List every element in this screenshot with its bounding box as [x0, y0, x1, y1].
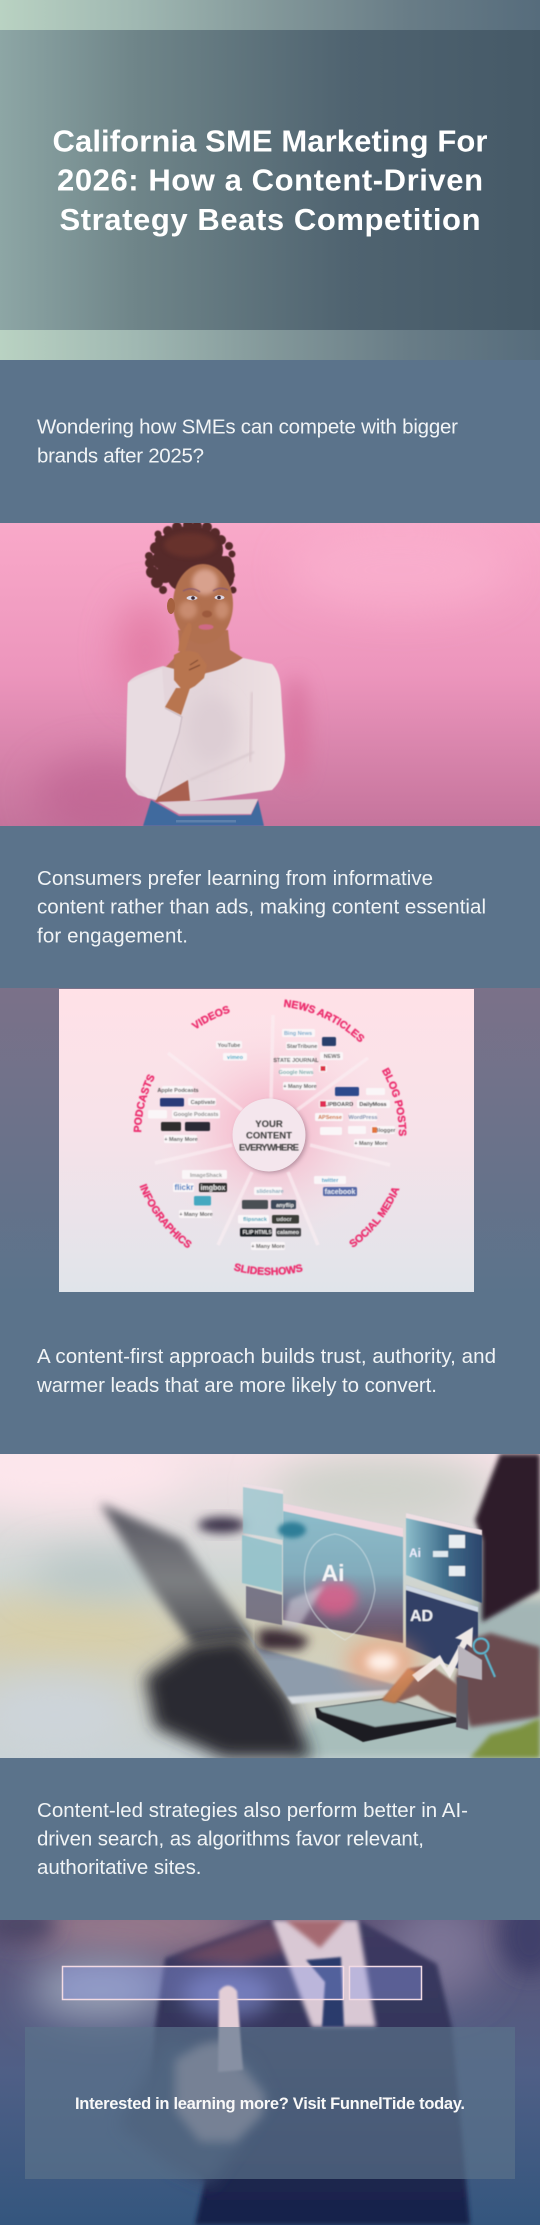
- chips: social media: [314, 1176, 357, 1196]
- search bar fill: [62, 1966, 344, 2000]
- dark blurred laptop base: [145, 1637, 312, 1758]
- chips: slideshows: udocr: [276, 1217, 292, 1223]
- chips: social media: facebook: [325, 1189, 355, 1196]
- text block: consumers prefer content: [37, 867, 486, 948]
- woman's sweater: [126, 658, 285, 802]
- chips: blog posts: FLIPBOARD: [321, 1102, 353, 1108]
- CTA overlay box: [25, 2027, 515, 2179]
- hologram: right top panel: Ai: [409, 1546, 421, 1560]
- woman's neck: [165, 630, 243, 678]
- text block: AI-driven search: Content-led strategies also perform better in AI-: [37, 1799, 468, 1822]
- centre circle: YOUR: [255, 1119, 283, 1130]
- chips: videos: vimeo: [227, 1055, 244, 1061]
- green plant: [470, 1718, 540, 1758]
- hologram: AD panel: AD: [410, 1608, 433, 1625]
- chips: slideshows: slideshare: [256, 1189, 284, 1195]
- person's hand on phone side: [455, 1633, 540, 1727]
- title: [52, 124, 488, 237]
- pointing hand: [382, 1665, 465, 1715]
- panel backdrop behind wheel diagram: [0, 988, 540, 1292]
- search bar: [62, 1966, 344, 2000]
- text block: consumers prefer content: content rather than ads, making content essential: [37, 896, 486, 919]
- text block: AI-driven search: driven search, as algorithms favor relevant,: [37, 1828, 424, 1851]
- title: 2026: How a Content-Driven: [57, 163, 483, 198]
- light glow: [346, 1640, 418, 1684]
- text block: intro question: Wondering how SMEs can compete with bigger: [37, 416, 458, 439]
- chips: slideshows: + Many More: [251, 1244, 285, 1250]
- chips: slideshows: anyflip: [276, 1203, 294, 1209]
- hologram: AD panel: [406, 1585, 478, 1677]
- neck: [285, 1920, 345, 1948]
- phone: [315, 1698, 458, 1742]
- chips: videos: YouTube: [218, 1043, 240, 1049]
- teal backdrop at right: [470, 1600, 540, 1660]
- app strip: [456, 1677, 468, 1730]
- suit: [150, 1920, 470, 2225]
- top gradient band: [0, 0, 540, 30]
- photo: businessman touching search bar: [0, 1895, 540, 2225]
- chips: news articles: STATE JOURNAL: [273, 1058, 319, 1064]
- red-brown lapel glow: [172, 1922, 290, 1965]
- sleeve and hand: [118, 1986, 270, 2185]
- chips: infographics: flickr: [174, 1183, 194, 1192]
- chips: podcasts: [148, 1086, 220, 1143]
- chips: infographics: ImageShack: [190, 1173, 223, 1179]
- growth arrow: [412, 1627, 473, 1682]
- search button: [350, 1966, 422, 2000]
- woman's face: [167, 564, 234, 631]
- text block: content-first approach: A content-first approach builds trust, authority, and: [37, 1345, 496, 1368]
- chips: slideshows: calameo: [277, 1230, 300, 1236]
- chips: news articles: Bing News: [284, 1031, 312, 1037]
- chips: slideshows: FLIP HTML5: [243, 1230, 272, 1236]
- lower gradient band: [0, 330, 540, 360]
- text block: content-first approach: [36, 1345, 496, 1397]
- chips: slideshows: flipsnack: [243, 1217, 268, 1223]
- keyboard: [240, 1622, 394, 1706]
- hologram: right top panel: [406, 1513, 482, 1603]
- chips: news articles: [273, 1029, 343, 1090]
- chips: news articles: + Many More: [283, 1084, 317, 1090]
- text block: content-first approach: warmer leads that are more likely to convert.: [36, 1374, 437, 1397]
- chips: news articles: NEWS: [324, 1054, 341, 1060]
- title: Strategy Beats Competition: [60, 202, 480, 237]
- chips: infographics: + Many More: [179, 1212, 213, 1218]
- laptop screen back: [100, 1503, 255, 1645]
- woman's hand and forearm: [164, 642, 206, 716]
- table surface: [290, 1710, 540, 1758]
- data panel in hand: [458, 1645, 482, 1680]
- curved category labels: BLOG POSTS: [381, 1066, 408, 1137]
- curved category labels: [132, 998, 408, 1276]
- centre circle: [232, 1098, 307, 1173]
- person silhouette: [475, 1454, 540, 1622]
- chips: blog posts: APSense: [318, 1115, 342, 1121]
- chips: podcasts: Captivate: [191, 1100, 215, 1106]
- chips: infographics: imgbox: [201, 1185, 226, 1192]
- magnifier: [474, 1638, 495, 1677]
- blurred mug: [198, 1517, 246, 1533]
- chips: news articles: Google News: [279, 1070, 313, 1076]
- shirt collar: [272, 1920, 376, 2027]
- chips: blog posts: [315, 1087, 396, 1147]
- title: California SME Marketing For: [52, 124, 488, 158]
- hologram: main Ai panel: Ai: [322, 1560, 344, 1586]
- chips: blog posts: WordPress: [349, 1115, 377, 1121]
- text block: intro question: [37, 416, 458, 468]
- chips: blog posts: DailyMoss: [359, 1102, 387, 1108]
- photo: thinking woman on pink background: [0, 520, 540, 835]
- photo: laptop with AI holograms: [0, 1430, 540, 1758]
- hologram: main Ai panel: [258, 1503, 403, 1650]
- shirt hem and jeans: [143, 799, 264, 826]
- woman's left sleeve: [126, 682, 150, 798]
- chips: podcasts: Apple Podcasts: [157, 1088, 199, 1094]
- chips: social media: twitter: [322, 1178, 339, 1184]
- curved category labels: VIDEOS: [190, 1005, 230, 1030]
- panel: content everywhere wheel diagram: [59, 989, 474, 1292]
- chips: infographics: [173, 1170, 227, 1218]
- centre circle: CONTENT: [246, 1130, 292, 1142]
- CTA text: Interested in learning more? Visit FunnelTide today.: [75, 2095, 465, 2113]
- text block: intro question: brands after 2025?: [37, 444, 204, 468]
- centre circle: EVERYWHERE: [239, 1142, 299, 1154]
- curved category labels: PODCASTS: [132, 1074, 156, 1133]
- hologram: left panels: [242, 1483, 306, 1625]
- woman's hair: [145, 520, 236, 594]
- chips: podcasts: + Many More: [164, 1137, 198, 1143]
- text block: AI-driven search: [37, 1799, 468, 1879]
- chips: podcasts: Google Podcasts: [174, 1112, 218, 1118]
- chips: videos: [216, 1041, 247, 1061]
- chips: blog posts: + Many More: [354, 1141, 388, 1147]
- tie: [306, 1957, 344, 2027]
- curved category labels: SLIDESHOWS: [233, 1262, 304, 1276]
- finger glow: [183, 1971, 273, 2019]
- chips: slideshows: [238, 1187, 301, 1250]
- curved category labels: NEWS ARTICLES: [283, 998, 365, 1043]
- text block: AI-driven search: authoritative sites.: [37, 1856, 202, 1879]
- chips: news articles: StarTribune: [287, 1044, 317, 1050]
- hero panel: [0, 30, 540, 330]
- text block: consumers prefer content: Consumers prefer learning from informative: [37, 867, 433, 890]
- curved category labels: INFOGRAPHICS: [139, 1183, 192, 1248]
- woman's crossed forearm: [155, 780, 190, 802]
- curved category labels: SOCIAL MEDIA: [348, 1188, 400, 1248]
- chips: blog posts: Blogger: [375, 1128, 396, 1134]
- text block: consumers prefer content: for engagement.: [37, 925, 188, 948]
